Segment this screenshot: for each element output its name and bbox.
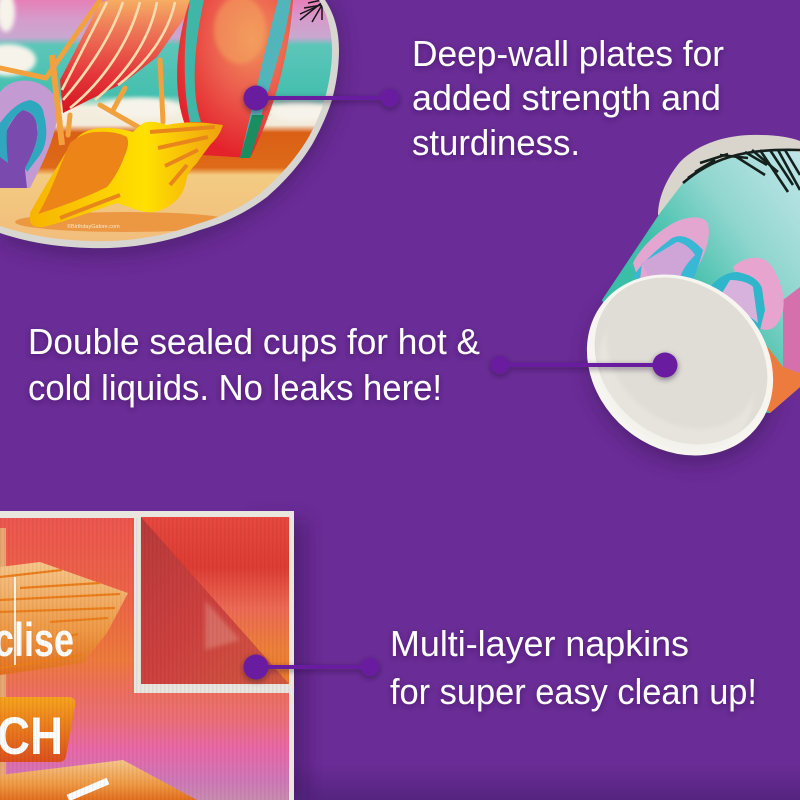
connector: cup (491, 352, 678, 378)
palm at top right (300, 0, 325, 22)
cup bottom highlight (569, 273, 783, 483)
chair stripes (62, 2, 175, 108)
folded corner underside (141, 517, 289, 684)
plate artwork (0, 0, 340, 250)
connector end dot (381, 89, 399, 107)
text: cups callout: cold liquids. No leaks here! (28, 367, 442, 408)
cup bottom outer lip (550, 237, 800, 493)
cup shadow (550, 242, 800, 502)
inner (722, 280, 758, 323)
connector: plate (244, 86, 399, 110)
cup bottom disc (561, 243, 800, 479)
text: cups callout: Double sealed cups for hot & (28, 321, 480, 362)
sole (633, 217, 709, 285)
board glow (214, 0, 266, 64)
text: napkins callout: Multi-layer napkins (390, 623, 689, 664)
cup rim (658, 135, 800, 230)
cup pink block (783, 287, 800, 373)
connector end dot (361, 658, 379, 676)
shell (30, 122, 223, 227)
flip-flop strap (0, 100, 46, 172)
surfboard (177, 0, 293, 158)
napkin ribs (0, 518, 289, 800)
sign post (0, 528, 6, 798)
text: napkins callout (390, 623, 757, 712)
folded corner top surface (141, 517, 289, 684)
shell ridges (60, 127, 215, 218)
third sign (0, 760, 197, 800)
plate shadow (0, 0, 343, 258)
chair front leg (52, 55, 62, 145)
board stripe right (240, 0, 291, 158)
napkin border (0, 511, 294, 800)
connector anchor dot (244, 654, 268, 680)
right flip-flop on cup (710, 258, 784, 330)
strap (710, 272, 765, 330)
sign: beach (0, 697, 75, 762)
cup bottom center (578, 255, 786, 459)
deck chair frame (0, 0, 163, 135)
connector: napkin (244, 654, 379, 680)
cup lower orange area (740, 333, 800, 413)
napkin shadow (250, 520, 306, 800)
text: plates callout (412, 33, 724, 163)
palm fronds (683, 150, 800, 192)
panel: cup illustration (550, 135, 800, 502)
sign: paradise (0, 562, 128, 675)
text: cups callout (28, 321, 480, 408)
inner (642, 242, 695, 280)
strap (633, 236, 703, 280)
panel: napkin illustration (0, 511, 306, 800)
third sign stroke (68, 781, 108, 798)
deck chair fabric (60, 0, 197, 113)
surf foam (0, 0, 328, 121)
napkin face (0, 518, 289, 800)
connector anchor dot (652, 352, 678, 378)
sand shade (15, 212, 235, 232)
text: plates callout: sturdiness. (412, 122, 580, 163)
fold highlight (205, 600, 240, 650)
sole (733, 258, 784, 330)
plate rim (0, 0, 339, 248)
shell body (38, 132, 128, 214)
text: plates callout: Deep-wall plates for (412, 33, 724, 74)
wood grain (0, 570, 120, 668)
connector anchor dot (244, 86, 268, 110)
text: plates callout: added strength and (412, 77, 721, 118)
flip-flop (0, 81, 58, 188)
left flip-flop on cup (633, 217, 709, 285)
panel: plate illustration (0, 0, 343, 258)
folded corner backing border (134, 511, 294, 693)
board stripe left (185, 0, 204, 122)
connector end dot (491, 356, 509, 374)
cup body (602, 150, 800, 413)
text: napkins callout: for super easy clean up! (390, 671, 757, 712)
copyright: ©BirthdayGalore.com (67, 223, 120, 230)
flip-flop sole (0, 110, 38, 188)
